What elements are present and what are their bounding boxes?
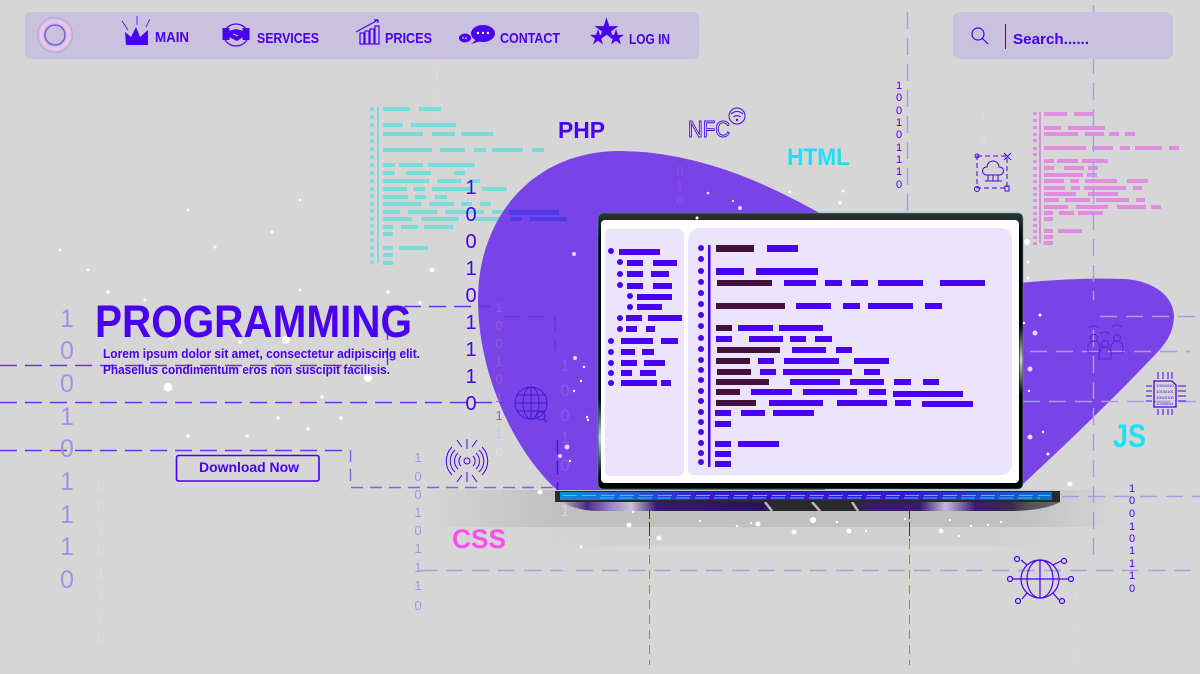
button: download now: Download Now [199,459,299,475]
blob: main purple [478,151,825,490]
icon: cloud network box [974,153,1011,192]
binary column: blue centre [465,177,477,415]
binary columns: faint: 1 [434,72,440,83]
icon: binary chip: 10011010 [1156,383,1175,388]
binary columns: faint: 0 [980,135,986,147]
binary column: large left: 1 [60,468,74,496]
binary column: blue centre: 1 [465,177,477,199]
binary columns: faint: 0 [560,381,570,400]
binary column: lower left: 1 [414,578,422,593]
binary column: large left: 0 [60,566,74,594]
label: PHP: PHP [558,117,605,143]
binary columns: faint: 1 [97,609,105,625]
label: NFC [688,108,745,142]
nav item: prices: PRICES [385,30,432,47]
binary column: on blob: 0 [495,318,503,333]
binary column: lower left: 0 [414,598,422,613]
binary column: bottom right: 1 [1129,570,1135,582]
binary columns: faint: 0 [97,499,105,515]
icon: binary chip: 10010100 [1156,395,1175,400]
nav bar [25,12,699,59]
binary columns: faint: 1 [434,85,440,96]
binary columns: faint: 0 [560,456,570,475]
icon: chat bubbles [459,25,495,44]
binary column: top right: 1 [896,80,902,92]
label: HTML: HTML [787,144,850,171]
binary column: on blob: 1 [495,408,503,423]
icon: binary chip: 10100101 [1156,389,1175,394]
binary column: bottom right: 1 [1129,558,1135,570]
binary column: top right: 0 [896,179,902,191]
binary column: on blob: 1 [495,354,503,369]
binary column: large left: 0 [60,337,74,365]
binary column: top right [896,80,902,191]
binary column: blue centre: 0 [465,231,477,253]
binary column: lower left: 1 [414,541,422,556]
binary column: top right: 0 [896,129,902,141]
binary column: blue centre: 1 [465,339,477,361]
code bars over blob [509,210,567,221]
icon: signal broadcast [446,439,488,482]
binary column: large left: 0 [60,435,74,463]
subtitle text: Lorem ipsum dolor sit amet, consectetur adipiscing elit. [103,346,420,361]
icon: magnifier [972,28,988,44]
nav item: main: MAIN [155,29,189,46]
nav item: contact: CONTACT [500,30,560,47]
screen panel: code editor [688,228,1012,475]
binary columns: faint: 1 [97,565,105,581]
binary column: lower left: 1 [414,450,422,465]
binary column: on blob: 1 [495,390,503,405]
binary columns: faint: 1 [560,428,570,447]
laptop [555,213,1060,511]
binary column: large left [60,305,74,594]
particles: left field [58,198,434,438]
binary column: large left: 1 [60,533,74,561]
screen panel: file tree [605,229,684,476]
code block: teal [370,107,544,265]
binary column: large left: 1 [60,403,74,431]
label: CSS: CSS [452,524,506,554]
icon: people wifi [1088,325,1123,359]
binary column: bottom right: 0 [1129,533,1135,545]
icon: network globe [1008,556,1074,604]
binary column: large left: 0 [60,370,74,398]
binary column: blue centre: 0 [465,285,477,307]
subtitle text: Phasellus condimentum eros non suscipit facilisis. [103,362,390,377]
binary column: on blob: 0 [495,445,503,460]
binary columns: faint [97,59,1078,663]
binary column: top right: 1 [896,166,902,178]
binary columns: faint: 0 [1072,621,1078,633]
binary column: blue centre: 1 [465,366,477,388]
binary columns: faint: 0 [1072,651,1078,663]
binary columns: faint: 1 [97,586,105,602]
binary columns: faint: 0 [97,477,105,493]
binary column: top right: 1 [896,117,902,129]
binary columns: faint: 1 [434,98,440,109]
binary columns: faint: 0 [980,122,986,134]
binary column: blue centre: 0 [465,204,477,226]
search box [953,12,1173,59]
binary column: large left: 1 [60,501,74,529]
binary column: bottom right: 1 [1129,545,1135,557]
binary columns: faint: 0 [434,111,440,122]
binary column: top right: 1 [896,142,902,154]
binary columns: faint: 1 [560,531,570,550]
binary columns: faint: 0 [434,59,440,70]
binary column: bottom right: 1 [1129,521,1135,533]
label: JS: JS [1113,418,1146,454]
binary columns: faint: 1 [97,522,105,538]
binary column: lower left: 0 [414,523,422,538]
binary columns: faint: 0 [677,194,684,208]
code block: pink [1033,112,1179,245]
binary column: large left: 1 [60,305,74,333]
icon: binary chip: 10100011 [1156,401,1175,406]
binary column: top right: 0 [896,105,902,117]
binary column: on blob [495,300,503,460]
search placeholder: Search...... [1013,31,1089,48]
binary columns: faint: 0 [560,556,570,575]
binary column: bottom right [1129,483,1135,595]
binary column: on blob: 1 [495,426,503,441]
title: PROGRAMMING [95,296,412,347]
laptop keyboard deck [555,491,1060,511]
binary column: bottom right: 0 [1129,495,1135,507]
blob: right purple [1020,279,1174,485]
laptop screen bezel [598,213,1023,489]
binary columns: faint: 0 [97,542,105,558]
binary column: blue centre: 0 [465,393,477,415]
binary column: bottom right: 0 [1129,583,1135,595]
icon: stars [590,18,624,44]
binary columns: faint: 1 [1072,591,1078,603]
icon: growth chart [356,20,379,44]
binary column: lower left: 0 [414,487,422,502]
binary columns: faint: 0 [560,406,570,425]
binary column: lower left: 1 [414,505,422,520]
nav item: services: SERVICES [257,30,319,47]
binary column: blue centre: 1 [465,258,477,280]
button: download now [176,456,319,481]
particles: around laptop [538,190,1072,548]
binary column: bottom right: 0 [1129,508,1135,520]
binary column: lower left: 0 [414,469,422,484]
binary column: top right: 1 [896,154,902,166]
laptop bezel glints [598,325,1022,475]
binary columns: faint: 0 [97,629,105,645]
subtitle text [103,346,420,377]
laptop white screen [601,220,1019,483]
icon: globe search [515,387,547,422]
binary columns: faint: 1 [677,179,684,193]
binary columns: faint: 1 [560,356,570,375]
label: NFC: NFC [688,116,730,142]
icon: handshake [222,24,250,46]
binary column: on blob: 0 [495,336,503,351]
binary column: on blob: 0 [495,372,503,387]
icon: logo rings [38,18,72,52]
binary column: bottom right: 1 [1129,483,1135,495]
laptop shadow [420,490,1120,545]
binary column: blue centre: 1 [465,312,477,334]
nav item: log in: LOG IN [629,31,670,48]
binary column: on blob: 1 [495,300,503,315]
icon: binary chip [1146,372,1186,415]
binary column: lower left [414,450,422,613]
binary columns: faint: 1 [980,109,986,121]
binary column: top right: 0 [896,92,902,104]
binary columns: faint: 1 [560,501,570,520]
icon: crown [122,16,150,45]
binary columns: faint: 0 [677,164,684,178]
binary column: lower left: 1 [414,560,422,575]
